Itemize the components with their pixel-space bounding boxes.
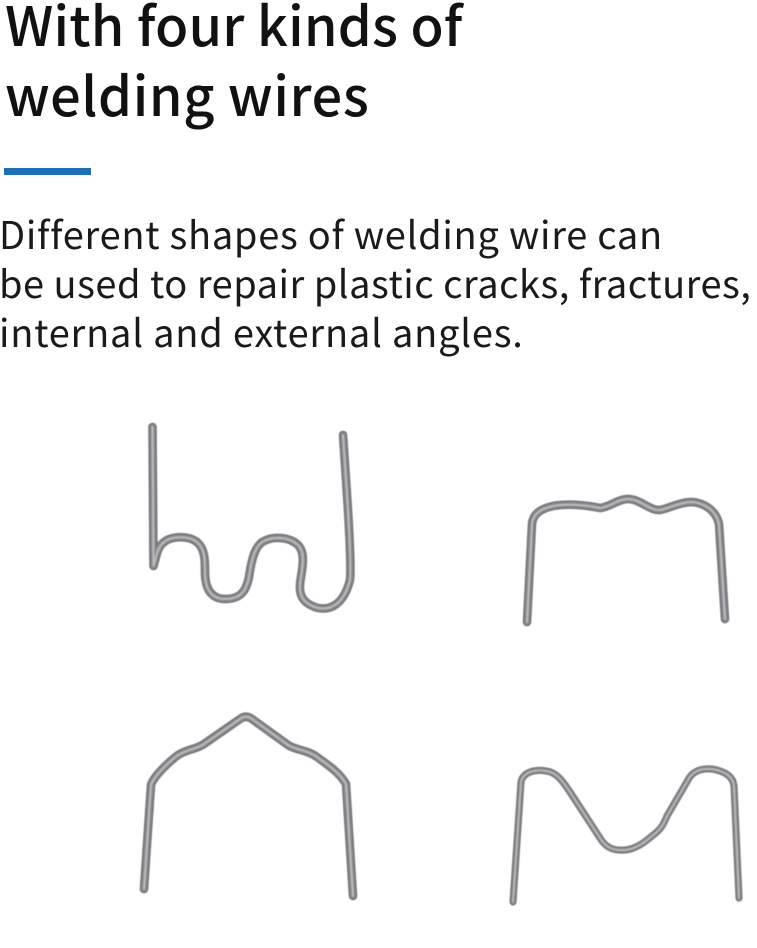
description text: be used to repair plastic cracks, fractures, <box>0 254 751 309</box>
wire: wave with long legs <box>152 427 350 608</box>
wire: M shape <box>513 769 739 902</box>
description text: internal and external angles. <box>0 303 524 358</box>
description text <box>0 205 751 358</box>
title: welding wires <box>5 53 369 132</box>
wire: low wave staple <box>527 499 725 622</box>
accent bar <box>4 168 91 175</box>
description text: Different shapes of welding wire can <box>0 205 663 260</box>
title <box>5 0 464 132</box>
wire: peaked roof <box>144 717 353 896</box>
